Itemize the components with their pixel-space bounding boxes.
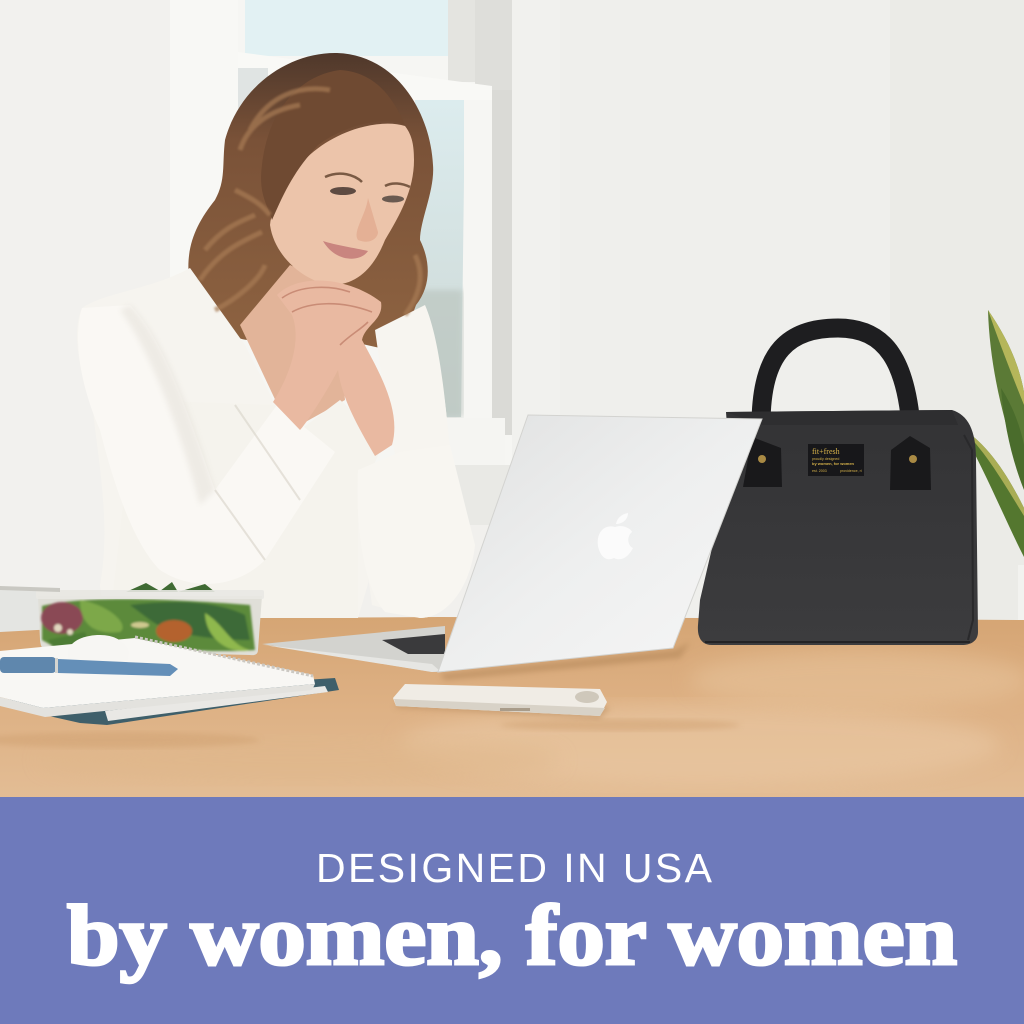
lips (323, 241, 368, 259)
window (238, 0, 512, 525)
bag body (698, 410, 978, 645)
brand label (808, 444, 864, 476)
eyes (330, 187, 404, 202)
earbud case (68, 635, 129, 660)
left sleeve (78, 305, 335, 584)
finger lines (282, 287, 372, 345)
middle leaf (1001, 388, 1024, 490)
spiral (135, 637, 313, 676)
laptop lid (438, 415, 762, 672)
spiral notebook (0, 638, 315, 708)
bag zipper band (726, 410, 958, 425)
brand label: est. 2003 (812, 469, 827, 473)
hair highlights (200, 89, 420, 315)
right shirt panel (375, 305, 450, 455)
laptop (262, 415, 762, 680)
container lip (36, 590, 264, 599)
front leaf (960, 427, 1024, 557)
laptop shadow on table (440, 642, 690, 680)
notebook and pen (0, 635, 339, 725)
brand label: by women, for women (812, 461, 855, 466)
bag side seam (964, 435, 973, 640)
laptop base and keyboard (262, 626, 445, 672)
wall background (0, 0, 1024, 640)
plant (960, 310, 1024, 621)
apple logo (598, 513, 633, 559)
plant pot (1018, 565, 1024, 621)
brand label: proudly designed (812, 457, 839, 461)
bag handle (761, 328, 912, 440)
eyebrows (325, 174, 410, 187)
cuff fold (215, 405, 300, 560)
left handle tab (743, 437, 782, 487)
bag bottom seam (705, 641, 970, 643)
brand label: providence, ri (840, 469, 862, 473)
right rivet (909, 455, 917, 463)
leaves on top (126, 582, 215, 592)
salad container (0, 582, 264, 655)
hair back (188, 53, 433, 348)
bag (698, 328, 978, 645)
brand label: fit+fresh (812, 447, 840, 456)
salad contents (41, 599, 255, 651)
back leaf edge (988, 310, 1024, 405)
woman (77, 53, 475, 618)
banner (0, 797, 1024, 1024)
left rivet (758, 455, 766, 463)
back leaf (988, 310, 1024, 482)
right handle tab (890, 436, 931, 490)
container body (38, 596, 262, 655)
front leaf edge (960, 427, 1024, 516)
shirt (77, 268, 475, 618)
headline: by women, for women (67, 887, 957, 983)
hardcover notebook (0, 678, 339, 725)
neck and chest (240, 265, 345, 425)
table (0, 617, 1024, 800)
phone (393, 684, 610, 719)
hair front strand (261, 70, 405, 220)
lid edge (0, 586, 60, 592)
eyebrow text: DESIGNED IN USA (316, 845, 713, 891)
pen (0, 657, 178, 676)
right sleeve (357, 445, 475, 618)
nose (357, 198, 378, 242)
face (270, 124, 414, 285)
clasped hands and forearms (273, 281, 394, 456)
shirt torso fill (110, 400, 385, 618)
sleeve shading (120, 305, 215, 505)
